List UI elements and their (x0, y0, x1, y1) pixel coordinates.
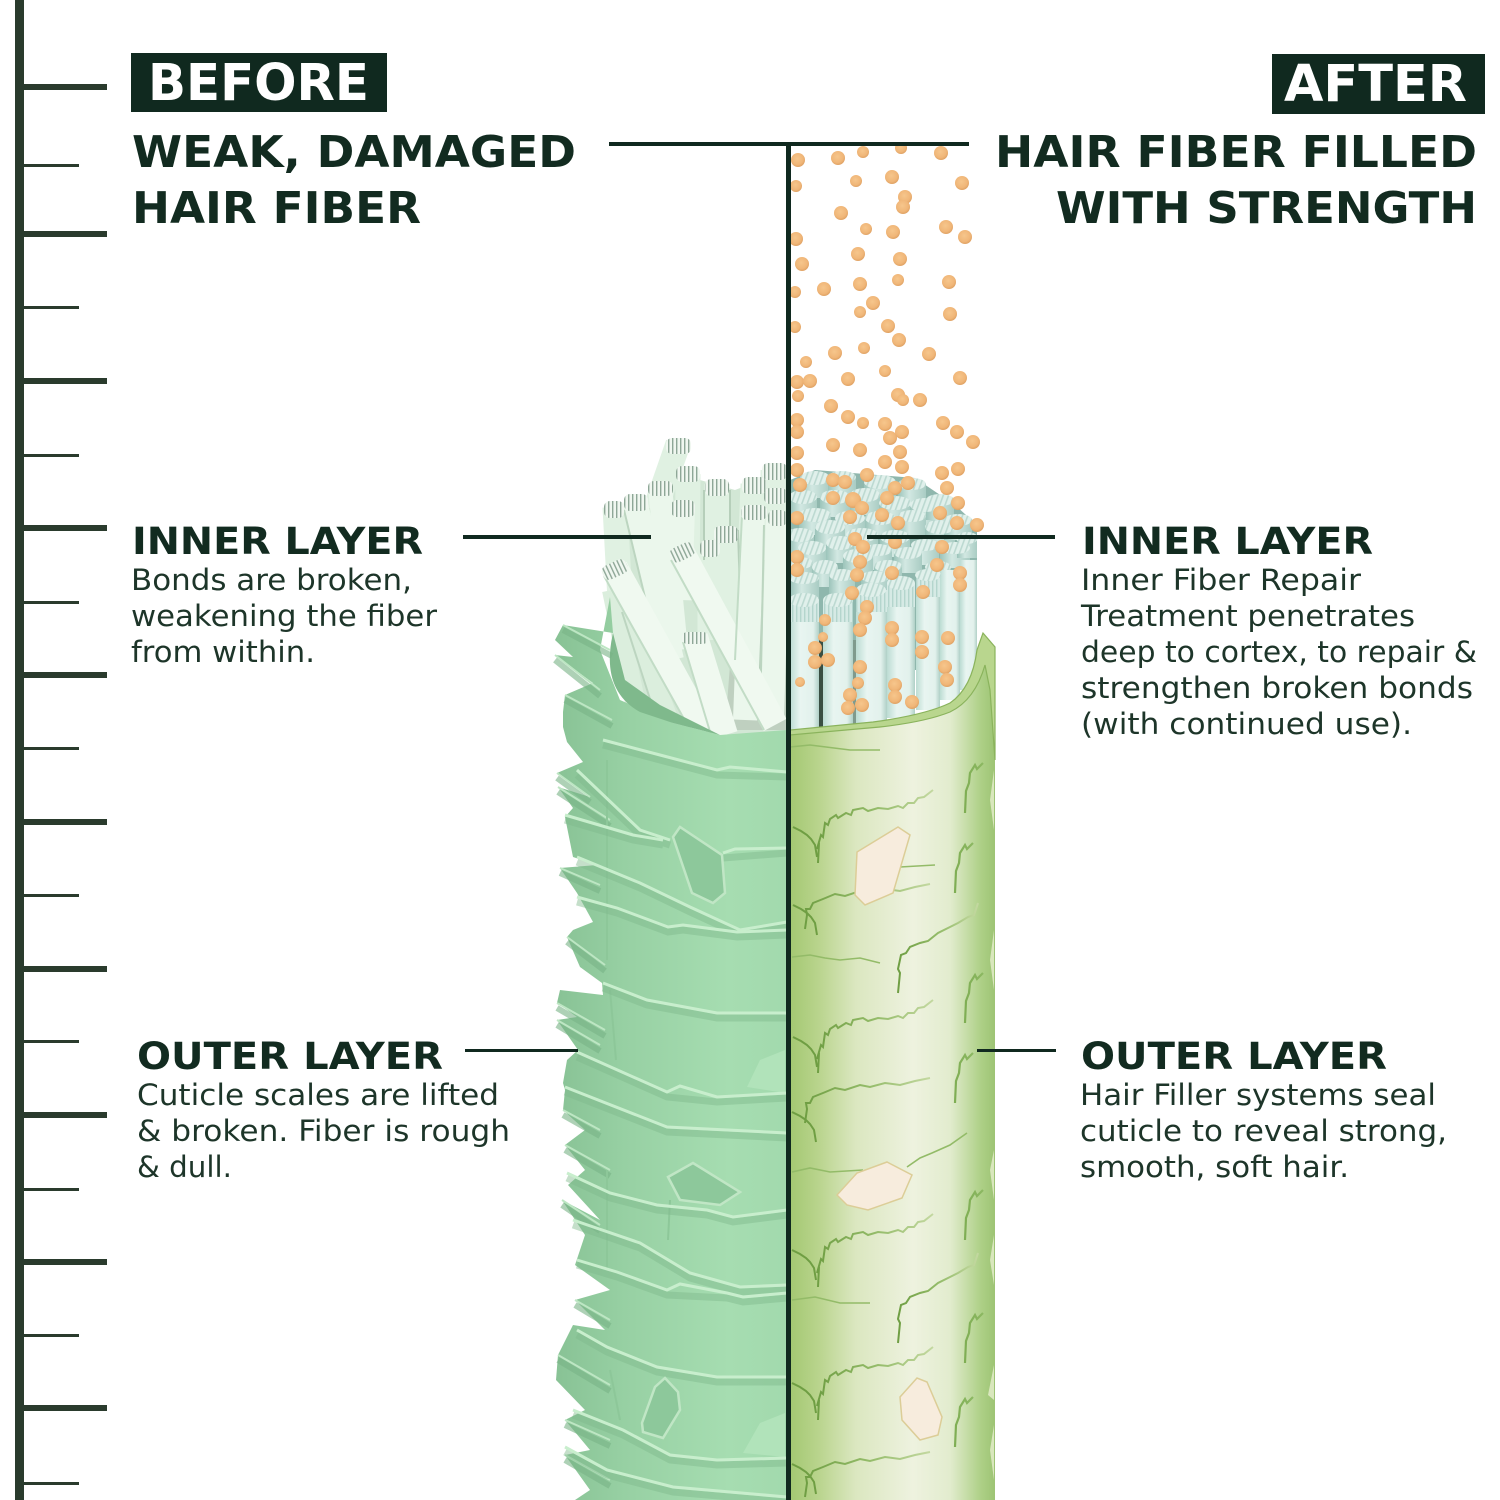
lifted scale edges (565, 740, 787, 1500)
text: before outer layer: OUTER LAYER (137, 1035, 443, 1078)
cuticle shell (555, 597, 787, 1500)
damaged inner strands (604, 444, 787, 745)
text: before inner layer: Bonds are broken, (131, 563, 412, 597)
text: before outer layer: & dull. (137, 1150, 232, 1184)
cuticle rim (790, 633, 995, 760)
text: after outer layer: cuticle to reveal strong, (1080, 1114, 1447, 1148)
sealed cuticle lines (790, 745, 983, 1497)
text: after inner layer (1080, 520, 1477, 741)
after fiber: sealed cuticle and repaired strands (786, 470, 995, 1500)
heading: after: HAIR FIBER FILLED (995, 127, 1477, 178)
smooth cuticle shell (790, 633, 995, 1500)
text: before inner layer (131, 520, 437, 669)
text: after outer layer: smooth, soft hair. (1080, 1150, 1349, 1184)
inner strands, front row (789, 560, 977, 735)
heading: before: HAIR FIBER (132, 183, 421, 234)
text: after inner layer: deep to cortex, to repair & (1081, 635, 1477, 669)
heading: after (995, 127, 1477, 234)
text: after outer layer: Hair Filler systems seal (1080, 1078, 1436, 1112)
text: after inner layer: Treatment penetrates (1080, 599, 1415, 633)
text: before inner layer: weakening the fiber (131, 599, 437, 633)
filler particles (789, 142, 984, 715)
heading: after: WITH STRENGTH (1056, 183, 1477, 234)
text: before inner layer: from within. (131, 635, 315, 669)
after badge: AFTER (1284, 55, 1467, 114)
strand tips (600, 438, 787, 644)
cuticle patches (837, 827, 942, 1440)
text: before outer layer (137, 1035, 510, 1184)
text: after inner layer: (with continued use). (1081, 707, 1412, 741)
text: before outer layer: Cuticle scales are lifted (137, 1078, 499, 1112)
cuticle gaps (642, 827, 740, 1438)
text: after outer layer: OUTER LAYER (1081, 1035, 1387, 1078)
ruler scale (15, 0, 107, 1500)
before fiber: damaged strands and lifted cuticle (555, 438, 787, 1500)
text: before outer layer: & broken. Fiber is rough (137, 1114, 510, 1148)
torn patches (743, 1050, 785, 1457)
text: before inner layer: INNER LAYER (132, 520, 423, 563)
text: after outer layer (1080, 1035, 1447, 1184)
before badge: BEFORE (148, 54, 369, 113)
heading: before (132, 127, 576, 234)
text: after inner layer: strengthen broken bonds (1081, 671, 1473, 705)
text: after inner layer: Inner Fiber Repair (1081, 563, 1361, 597)
feather tips (555, 625, 670, 1486)
text: after inner layer: INNER LAYER (1082, 520, 1373, 563)
heading: before: WEAK, DAMAGED (132, 127, 576, 178)
inner strands, back rows (786, 470, 978, 670)
edge slivers (988, 770, 994, 1480)
connector lines and divider (463, 142, 1056, 1500)
inner rim shading (610, 633, 720, 735)
